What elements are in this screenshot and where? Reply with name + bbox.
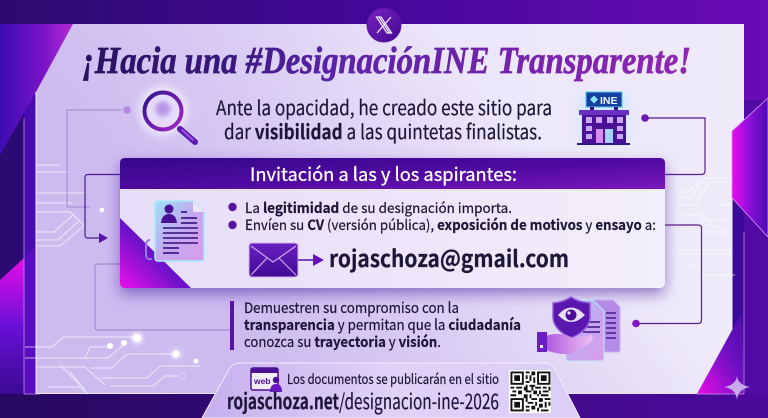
commitment text with bar: transparencia y permitan que la ciudadanía <box>244 314 521 335</box>
icon: X logo badge <box>367 8 401 42</box>
commitment text with bar <box>230 297 521 352</box>
card header: Invitación a las y los aspirantes: <box>250 161 517 187</box>
icon: web person: web <box>253 376 271 386</box>
connector lines <box>67 106 705 330</box>
circuit glow nodes <box>100 208 198 364</box>
intro text: dar visibilidad a las quintetas finalistas. <box>224 116 542 145</box>
email address: rojaschoza@gmail.com <box>329 240 569 274</box>
bullet list: La legitimidad de su designación importa. <box>245 198 512 218</box>
commitment text with bar: Demuestren su compromiso con la <box>244 297 459 318</box>
website address: rojaschoza.net/designacion-ine-2026 <box>227 386 499 416</box>
icon: CV document <box>146 201 204 261</box>
intro text: Ante la opacidad, he creado este sitio para <box>216 92 552 121</box>
icon: INE building <box>577 92 630 145</box>
footer note: Los documentos se publicarán en el sitio <box>287 368 499 388</box>
icon: shield with documents and hand <box>537 297 620 361</box>
panel: invitation card <box>120 158 665 288</box>
magenta corner <box>120 218 191 288</box>
icon: sparkle star <box>724 376 750 400</box>
icon: envelope with arrow <box>249 243 324 277</box>
icon: web person <box>251 368 282 392</box>
title: ¡Hacia una #DesignaciónINE Transparente! <box>82 40 691 82</box>
bullet list: Envíen su CV (versión pública), exposición de motivos y ensayo a: <box>245 215 656 235</box>
icon: magnifying glass <box>138 86 195 142</box>
intro text <box>216 92 552 145</box>
circuit traces <box>25 165 735 394</box>
QR code <box>509 370 551 413</box>
panel: website footer <box>202 363 580 418</box>
card header <box>120 158 665 189</box>
bullet list <box>228 198 656 235</box>
icon: INE building: INE <box>600 95 618 107</box>
left decorative wedges <box>0 24 73 394</box>
commitment text with bar: conozca su trayectoria y visión. <box>244 331 441 352</box>
right decorative shapes <box>697 98 768 394</box>
